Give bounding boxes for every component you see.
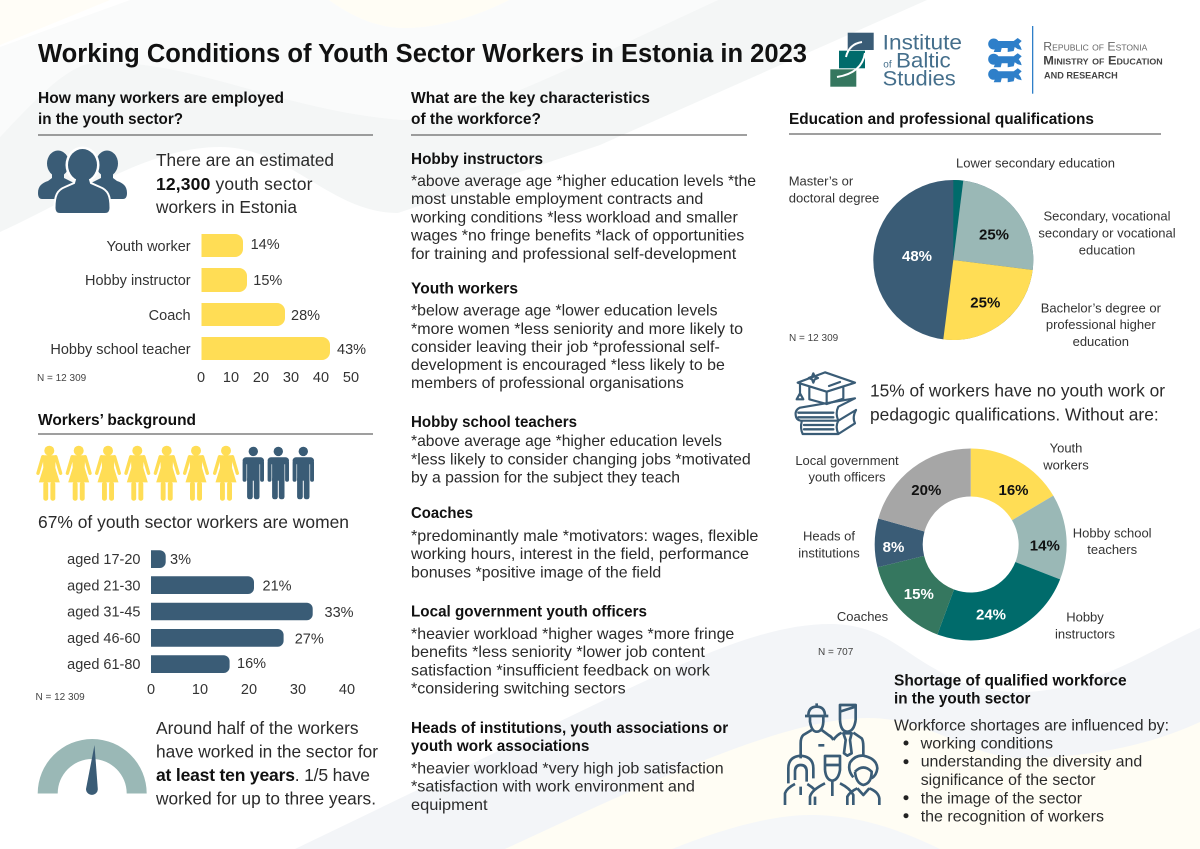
text block: shortage of qualified workforce bbox=[894, 672, 1169, 825]
text block: youth workers: *below average age *lower education levels bbox=[411, 303, 718, 320]
donut chart: workers without qualifications: instructors bbox=[1055, 626, 1115, 641]
text block: coaches: bonuses *positive image of the field bbox=[411, 564, 661, 581]
text: estimated workers bbox=[155, 150, 334, 217]
bar chart: workforce by age: 3% bbox=[170, 552, 191, 568]
donut chart: workers without qualifications: 8% bbox=[883, 539, 904, 556]
logo: Institute of Baltic Studies bbox=[830, 32, 962, 91]
donut chart: workers without qualifications: N = 707 bbox=[818, 647, 854, 658]
text block: heads of institutions bbox=[411, 720, 728, 814]
text: estimated workers: 12,300 youth sector bbox=[156, 174, 313, 194]
text block: shortage of qualified workforce: in the youth sector bbox=[894, 691, 1030, 708]
bar chart: workforce by role: 10 bbox=[223, 370, 239, 386]
text block: heads of institutions: *satisfaction with work environment and bbox=[411, 779, 695, 796]
bar chart: workforce by role: 14% bbox=[251, 237, 280, 253]
bar chart: workforce by role: N = 12 309 bbox=[37, 373, 87, 384]
logo: ministry text bbox=[1043, 41, 1163, 81]
text block: hobby instructors: working conditions *less workload and smaller bbox=[410, 210, 738, 226]
bar chart: workforce by role: 40 bbox=[313, 370, 329, 386]
donut chart: workers without qualifications: youth officers bbox=[808, 470, 886, 485]
bar chart: workforce by role: 0 bbox=[197, 370, 205, 386]
donut chart: workers without qualifications: Coaches bbox=[837, 609, 889, 624]
bar chart: workforce by role: Coach bbox=[149, 308, 191, 324]
logo: Institute of Baltic Studies: Institute bbox=[883, 32, 962, 55]
text block: hobby school teachers: *above average age *higher education levels bbox=[411, 433, 722, 450]
text: seniority: Around half of the workers bbox=[156, 718, 359, 738]
text block: local government youth officers bbox=[411, 603, 734, 698]
pictogram: 7 women and 3 men bbox=[38, 446, 314, 501]
donut chart: workers without qualifications: Hobby bbox=[1066, 610, 1104, 625]
heading: key characteristics bbox=[411, 90, 747, 135]
bar chart: workforce by age: 21% bbox=[262, 579, 292, 595]
bar chart: workforce by role: 43% bbox=[337, 342, 366, 358]
text: seniority: worked for up to three years. bbox=[155, 789, 376, 809]
text: no qualifications: pedagogic qualifications. Without are: bbox=[870, 405, 1159, 425]
heading: key characteristics: of the workforce? bbox=[411, 111, 541, 128]
text: estimated workers: There are an estimated bbox=[156, 150, 334, 170]
logo: ministry text: Ministry of Education bbox=[1043, 55, 1163, 67]
text: no qualifications bbox=[870, 381, 1165, 425]
pie chart: education levels: Secondary, vocational bbox=[1044, 208, 1171, 223]
donut chart: workers without qualifications: Youth bbox=[1050, 440, 1082, 455]
text block: shortage of qualified workforce: the image of the sector bbox=[921, 790, 1083, 807]
donut chart: workers without qualifications: 24% bbox=[976, 607, 1006, 624]
text block: youth workers: members of professional organisations bbox=[411, 375, 684, 392]
bar chart: workforce by age: aged 61-80 bbox=[67, 657, 140, 673]
text: seniority: at least ten years. 1/5 have bbox=[156, 765, 370, 785]
text block: youth workers: consider leaving their job *professional self- bbox=[411, 339, 720, 356]
text: seniority: have worked in the sector for bbox=[156, 742, 378, 762]
icon: group of workers bbox=[785, 703, 879, 805]
logo: Institute of Baltic Studies: of bbox=[883, 59, 892, 70]
logo: ministry text: AND RESEARCH bbox=[1044, 70, 1118, 81]
icon: graduation cap on books bbox=[796, 372, 856, 434]
pie chart: education levels: Master’s or bbox=[789, 174, 854, 189]
heading: how many workers: How many workers are employed bbox=[38, 90, 284, 107]
bar chart: workforce by role: 30 bbox=[283, 370, 299, 386]
icon: gauge bbox=[38, 739, 147, 795]
text block: hobby school teachers: by a passion for the subject they teach bbox=[411, 470, 680, 487]
donut chart: workers without qualifications: institutions bbox=[798, 546, 860, 561]
text block: local government youth officers: *heavier workload *higher wages *more fringe bbox=[411, 626, 734, 643]
heading: how many workers: in the youth sector? bbox=[38, 111, 183, 128]
donut chart: workers without qualifications: 14% bbox=[1030, 537, 1060, 554]
bar chart: workforce by age: aged 21-30 bbox=[67, 579, 140, 595]
pie chart: education levels: 25% bbox=[970, 295, 1000, 312]
bar chart: workforce by role: Hobby school teacher bbox=[50, 342, 191, 358]
bar chart: workforce by age: aged 46-60 bbox=[67, 631, 140, 647]
text: share of women: 67% of youth sector workers are women bbox=[38, 512, 349, 532]
text block: coaches: *predominantly male *motivators: wages, flexible bbox=[411, 528, 759, 545]
bar chart: workforce by role: 28% bbox=[291, 308, 320, 324]
text block: hobby instructors: *above average age *higher education levels *the bbox=[411, 173, 756, 190]
text block: local government youth officers: Local government youth officers bbox=[411, 603, 647, 620]
bar chart: workforce by role: 50 bbox=[343, 370, 359, 386]
text block: hobby instructors: wages *no fringe benefits *lack of opportunities bbox=[410, 228, 744, 244]
text block: youth workers: Youth workers bbox=[411, 280, 518, 298]
text block: shortage of qualified workforce: significance of the sector bbox=[921, 772, 1096, 789]
donut chart: workers without qualifications: workers bbox=[1042, 457, 1089, 472]
bar chart: workforce by age: 30 bbox=[290, 682, 306, 698]
icon: group of people bbox=[38, 146, 127, 214]
pie chart: education levels: doctoral degree bbox=[789, 190, 879, 205]
text block: shortage of qualified workforce: understanding the diversity and bbox=[921, 754, 1142, 771]
text block: local government youth officers: *considering switching sectors bbox=[411, 681, 626, 698]
logo: Institute of Baltic Studies: Studies bbox=[883, 68, 956, 91]
text block: coaches: working hours, interest in the field, performance bbox=[410, 546, 749, 563]
text block: heads of institutions: Heads of institutions, youth associations or bbox=[411, 720, 728, 737]
bar chart: workforce by role: Hobby instructor bbox=[85, 273, 191, 289]
bar chart: workforce by role: Youth worker bbox=[106, 239, 191, 255]
text: estimated workers: workers in Estonia bbox=[155, 197, 297, 217]
text block: local government youth officers: satisfaction *insufficient feedback on work bbox=[411, 662, 711, 679]
text block: shortage of qualified workforce: the recognition of workers bbox=[921, 808, 1104, 825]
text block: hobby instructors: for training and professional self-development bbox=[411, 246, 737, 263]
text: seniority bbox=[155, 718, 378, 809]
donut chart: workers without qualifications: 20% bbox=[911, 482, 941, 499]
bar chart: workforce by age: 10 bbox=[192, 682, 208, 698]
pie chart: education levels: 48% bbox=[902, 248, 932, 265]
pie chart: education levels: secondary or vocational bbox=[1038, 226, 1176, 241]
heading: education and qualifications: Education and professional qualifications bbox=[789, 111, 1094, 128]
bar chart: workforce by age: aged 17-20 bbox=[67, 552, 140, 568]
bar chart: workforce by age bbox=[36, 550, 355, 703]
bar chart: workforce by age: 20 bbox=[241, 682, 257, 698]
pie chart: education levels: 25% bbox=[979, 226, 1009, 243]
logo: ministry text: Republic of Estonia bbox=[1043, 41, 1148, 53]
text block: hobby instructors: most unstable employment contracts and bbox=[411, 191, 703, 208]
pie chart: education levels: education bbox=[1073, 334, 1129, 349]
text block: youth workers: *more women *less seniority and more likely to bbox=[411, 321, 743, 338]
bar chart: workforce by role bbox=[37, 234, 366, 386]
text: no qualifications: 15% of workers have no youth work or bbox=[870, 381, 1165, 401]
bar chart: workforce by role: 20 bbox=[253, 370, 269, 386]
text block: hobby school teachers bbox=[411, 414, 751, 487]
logo: Institute of Baltic Studies: Baltic bbox=[896, 49, 951, 72]
text block: youth workers bbox=[411, 280, 743, 392]
text block: heads of institutions: youth work associations bbox=[411, 738, 589, 755]
donut chart: workers without qualifications: Local government bbox=[795, 453, 899, 468]
bar chart: workforce by age: 33% bbox=[324, 605, 354, 621]
donut chart: workers without qualifications: teachers bbox=[1087, 542, 1138, 557]
text block: hobby instructors bbox=[410, 151, 756, 263]
text block: coaches: Coaches bbox=[411, 505, 473, 522]
pie chart: education levels: Lower secondary education bbox=[956, 155, 1115, 170]
text block: local government youth officers: benefits *less seniority *lower job content bbox=[411, 644, 705, 661]
donut chart: workers without qualifications: Heads of bbox=[803, 529, 855, 544]
donut chart: workers without qualifications: Hobby school bbox=[1073, 525, 1152, 540]
pie chart: education levels bbox=[789, 155, 1176, 349]
heading: how many workers bbox=[38, 90, 373, 135]
bar chart: workforce by age: 16% bbox=[237, 656, 266, 672]
heading: workers' background: Workers’ background bbox=[38, 412, 196, 429]
bar chart: workforce by age: 0 bbox=[147, 682, 155, 698]
bar chart: workforce by age: aged 31-45 bbox=[67, 605, 140, 621]
text block: shortage of qualified workforce: Workforce shortages are influenced by: bbox=[894, 717, 1169, 734]
text block: shortage of qualified workforce: Shortage of qualified workforce bbox=[894, 672, 1127, 689]
text block: heads of institutions: equipment bbox=[411, 797, 488, 814]
text block: hobby school teachers: Hobby school teachers bbox=[411, 414, 577, 431]
logo: Estonian coat of arms bbox=[988, 26, 1033, 94]
bar chart: workforce by age: 40 bbox=[339, 682, 355, 698]
heading: key characteristics: What are the key characteristics bbox=[411, 90, 650, 107]
text block: hobby instructors: Hobby instructors bbox=[411, 151, 543, 168]
bar chart: workforce by age: N = 12 309 bbox=[36, 692, 85, 703]
pie chart: education levels: N = 12 309 bbox=[789, 333, 839, 344]
pie chart: education levels: professional higher bbox=[1046, 317, 1156, 332]
text block: heads of institutions: *heavier workload *very high job satisfaction bbox=[411, 761, 724, 778]
text block: shortage of qualified workforce: working conditions bbox=[920, 735, 1053, 752]
bar chart: workforce by role: 15% bbox=[253, 273, 282, 289]
title: Working Conditions of Youth Sector Workers in Estonia in 2023 bbox=[38, 40, 807, 68]
text block: coaches bbox=[410, 505, 759, 581]
donut chart: workers without qualifications: 15% bbox=[904, 586, 934, 603]
pie chart: education levels: education bbox=[1079, 242, 1135, 257]
donut chart: workers without qualifications bbox=[795, 440, 1152, 658]
pie chart: education levels: Bachelor’s degree or bbox=[1041, 300, 1162, 315]
text block: youth workers: development is encouraged *less likely to be bbox=[411, 357, 725, 374]
bar chart: workforce by age: 27% bbox=[295, 632, 324, 648]
donut chart: workers without qualifications: 16% bbox=[998, 482, 1029, 499]
text block: hobby school teachers: *less likely to consider changing jobs *motivated bbox=[411, 451, 751, 468]
